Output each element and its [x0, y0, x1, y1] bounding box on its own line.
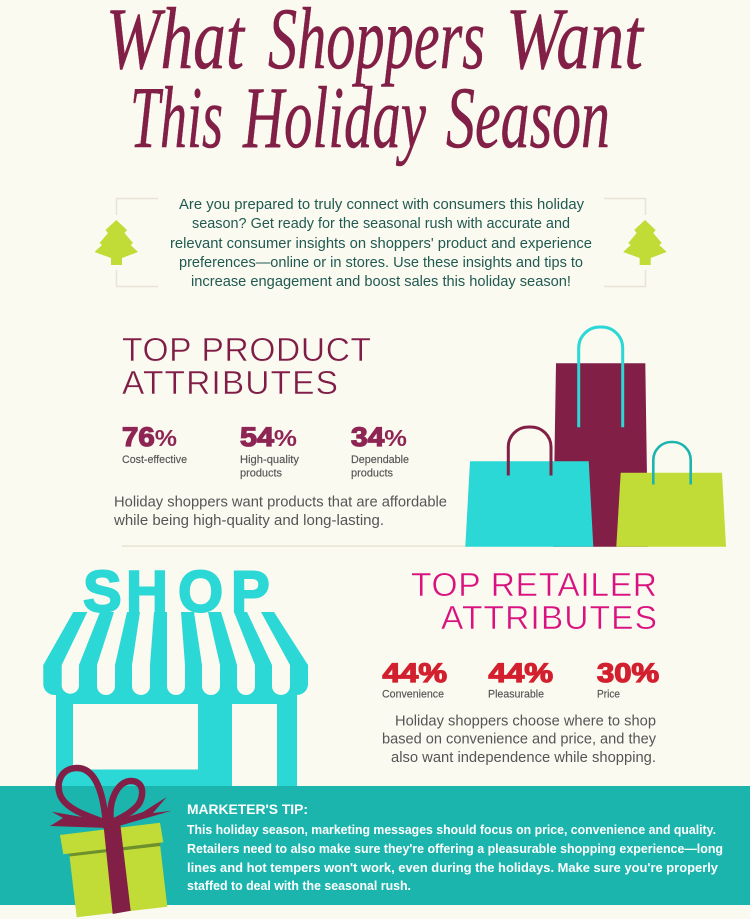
stat: 34%: 34%	[351, 422, 407, 452]
stat: 44% convenience: Convenience	[382, 689, 444, 701]
icon: shopping bags	[465, 327, 726, 547]
icon: shop storefront	[43, 560, 308, 790]
retailer paragraph: also want independence while shopping.	[391, 749, 656, 766]
panel: intro	[94, 196, 667, 290]
product paragraph	[113, 494, 447, 529]
icon: left tree	[94, 220, 138, 265]
stat: 76%	[122, 422, 187, 466]
shop sign: SHOP	[83, 560, 270, 624]
marketer's tip text: Retailers need to also make sure they're offering a pleasurable shopping experience—long	[187, 842, 723, 856]
marketer's tip text: This holiday season, marketing messages should focus on price, convenience and quality.	[187, 823, 716, 837]
retailer paragraph	[382, 712, 656, 766]
stat: 44% pleasurable: 44%	[488, 658, 553, 688]
title: Holiday	[242, 70, 427, 167]
retailer paragraph: Holiday shoppers choose where to shop	[395, 712, 656, 730]
title: This	[130, 70, 223, 167]
heading: ATTRIBUTES	[441, 600, 657, 637]
stat: 54%	[240, 422, 300, 480]
retailer paragraph: based on convenience and price, and they	[382, 730, 656, 748]
heading: ATTRIBUTES	[122, 365, 338, 402]
panel: top product attributes	[113, 332, 447, 529]
stat: 44% convenience: 44%	[382, 658, 447, 688]
stat: 30% price: 30%	[597, 658, 659, 688]
icon: gift box	[50, 768, 172, 917]
intro text: season? Get ready for the seasonal rush with accurate and	[192, 215, 570, 232]
product paragraph: while being high-quality and long-lasting.	[113, 512, 384, 529]
stat: 54%: High-quality	[240, 454, 300, 466]
stat: 30% price	[597, 658, 659, 701]
marketer's tip text: MARKETER'S TIP:	[187, 802, 308, 817]
intro text: increase engagement and boost sales this holiday season!	[191, 273, 571, 290]
stat: 44% pleasurable	[488, 658, 553, 701]
heading	[122, 332, 371, 402]
stat: 44% pleasurable: Pleasurable	[488, 689, 544, 701]
intro text	[170, 196, 592, 290]
stat: 34%: products	[351, 468, 394, 480]
title	[106, 0, 645, 167]
marketer's tip text	[187, 802, 723, 893]
intro text: relevant consumer insights on shoppers' product and experience	[170, 235, 592, 252]
title: Season	[446, 70, 610, 167]
panel: marketer's tip band	[0, 786, 750, 905]
marketer's tip text: staffed to deal with the seasonal rush.	[187, 879, 411, 893]
stat: 30% price: Price	[597, 689, 620, 701]
heading: TOP RETAILER	[411, 567, 657, 604]
intro text: Are you prepared to truly connect with consumers this holiday	[179, 196, 584, 213]
stat: 34%: Dependable	[351, 454, 409, 466]
stat: 54%: 54%	[240, 422, 297, 452]
heading	[411, 567, 657, 637]
heading: TOP PRODUCT	[122, 332, 371, 369]
stat: 76%: Cost-effective	[122, 454, 187, 466]
icon: right tree	[623, 220, 667, 265]
panel: top retailer attributes	[382, 567, 659, 766]
product paragraph: Holiday shoppers want products that are affordable	[114, 494, 447, 510]
stat: 76%: 76%	[122, 422, 177, 452]
stat: 54%: products	[240, 468, 283, 480]
stat: 44% convenience	[382, 658, 447, 701]
marketer's tip text: lines and hot tempers won't work, even during the holidays. Make sure you're properly	[187, 861, 718, 875]
intro text: preferences—online or in stores. Use these insights and tips to	[179, 254, 583, 271]
stat: 34%	[351, 422, 409, 480]
